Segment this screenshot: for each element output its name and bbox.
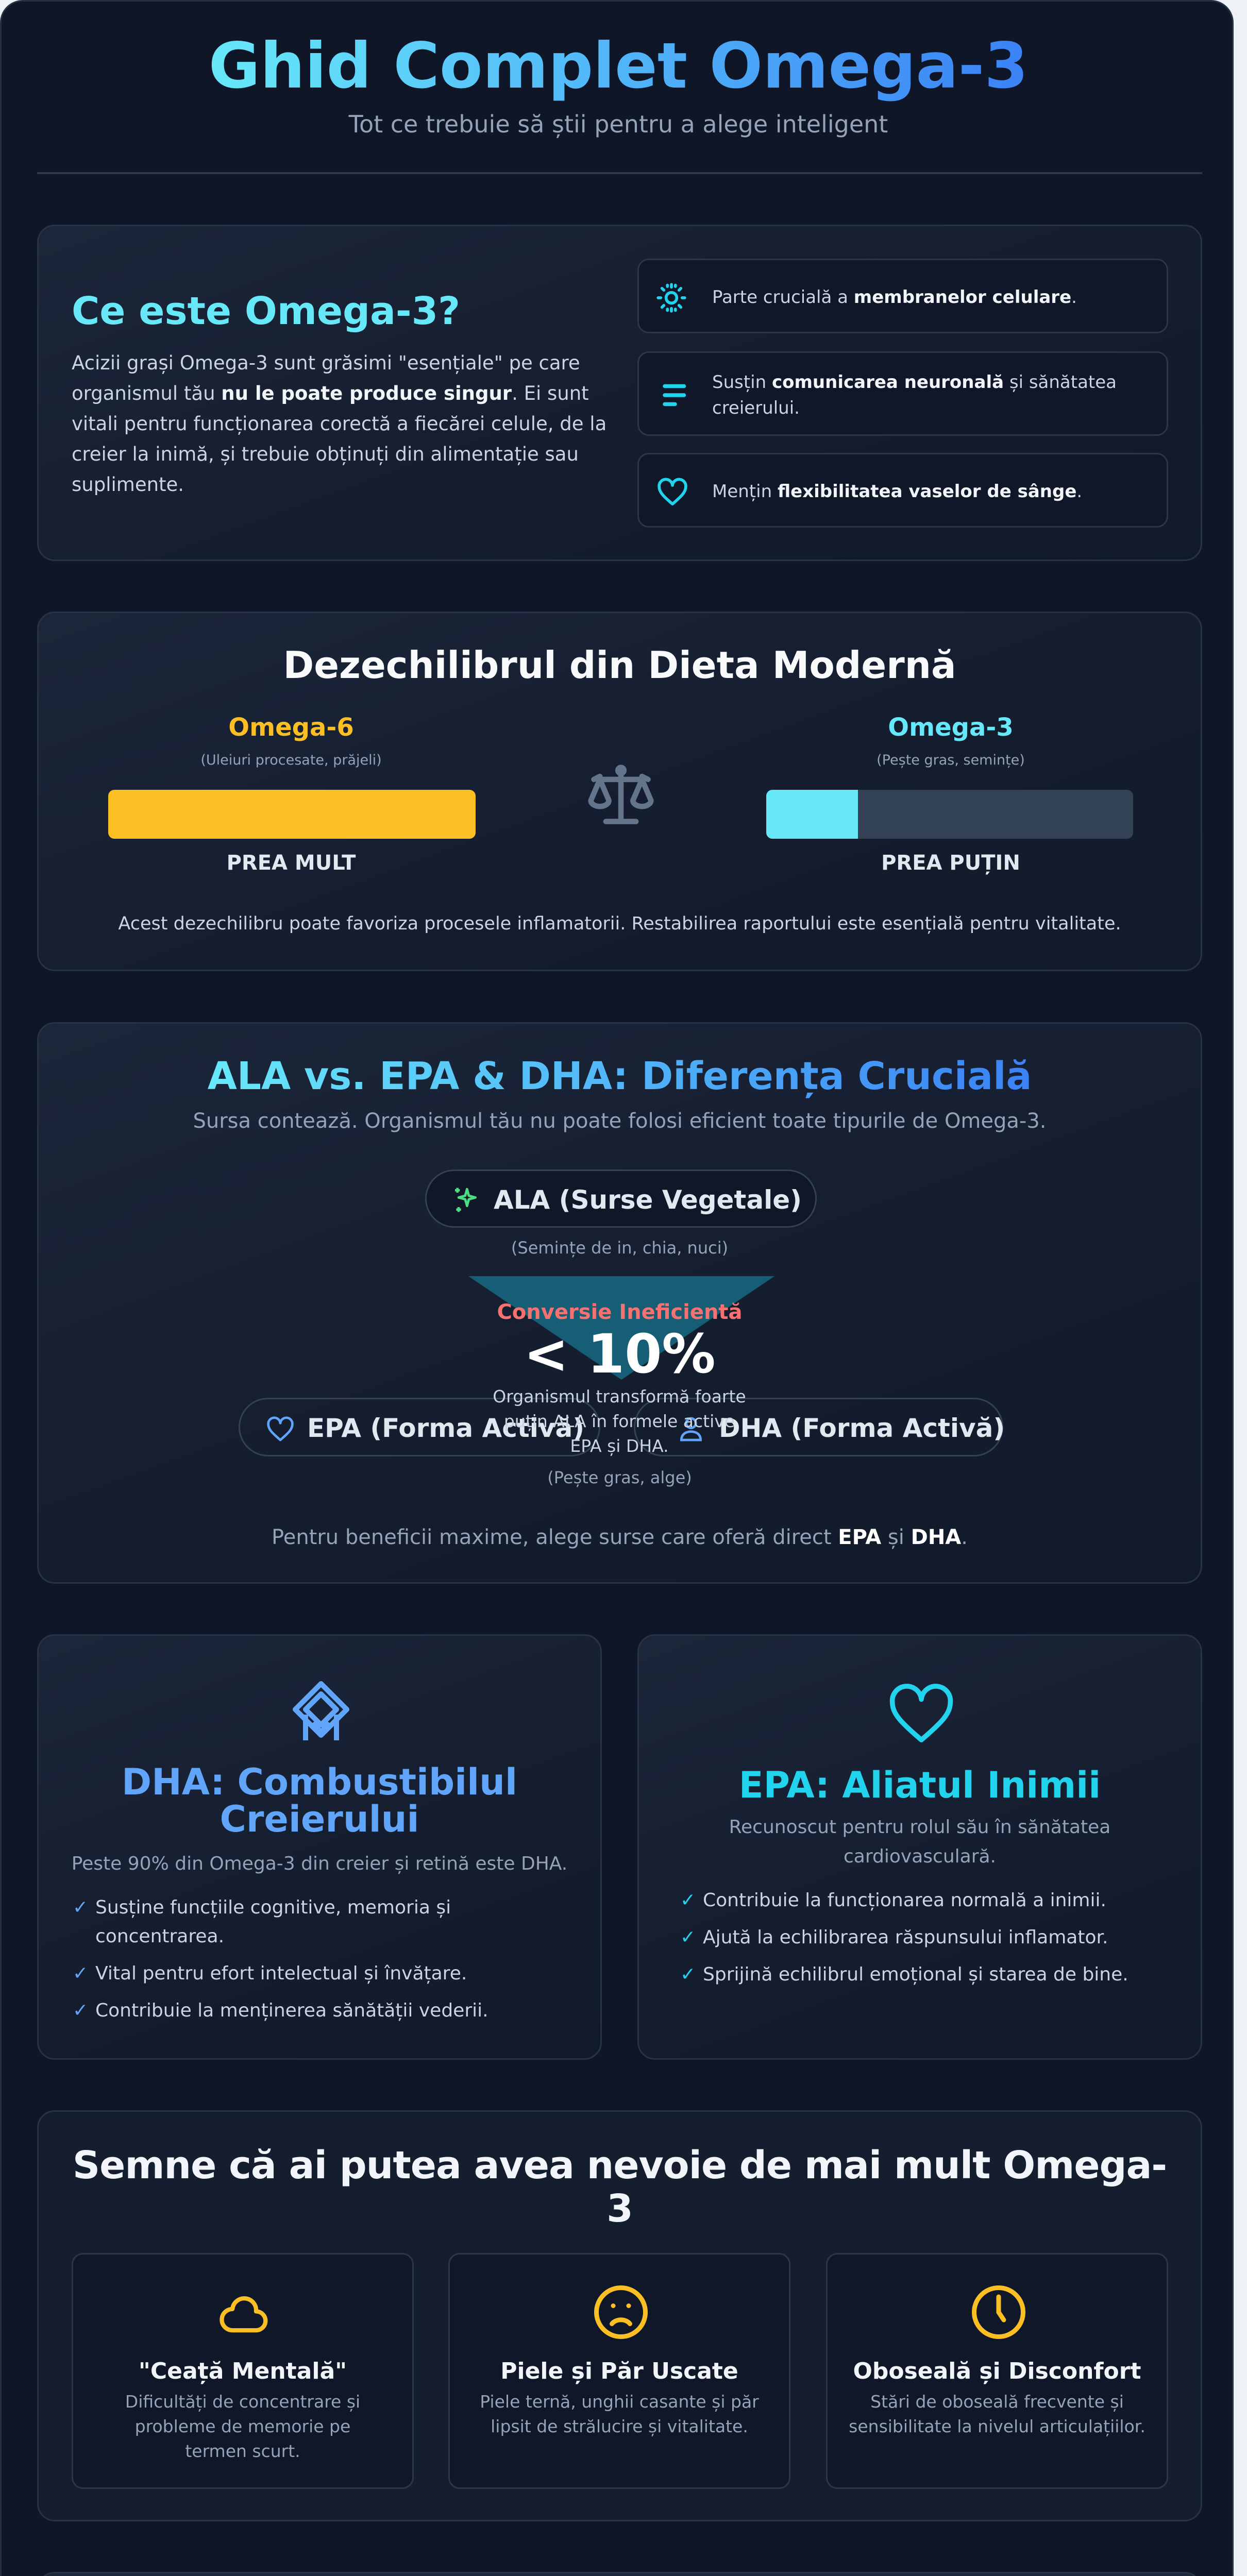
- list: DHA benefits: ✓: [73, 1897, 88, 1918]
- bar: omega-3: [766, 790, 1133, 839]
- omega-6 group: [108, 713, 476, 875]
- list: DHA benefits: ✓: [73, 2000, 88, 2021]
- card: piele: [448, 2253, 790, 2489]
- pill: ALA: ALA (Surse Vegetale): [494, 1185, 802, 1215]
- heading: DHA: DHA: Combustibilul: [122, 1761, 517, 1803]
- subtitle: Sursa contează. Organismul tău nu poate folosi eficient toate tipurile de Omega-3.: [193, 1109, 1046, 1133]
- list: EPA benefits: Ajută la echilibrarea răspunsului inflamator.: [703, 1927, 1108, 1948]
- list: EPA benefits: ✓: [680, 1890, 696, 1911]
- panel: EPA card: [637, 1634, 1202, 2060]
- list: DHA benefits: Vital pentru efort intelectual și învățare.: [95, 1963, 467, 1984]
- icon: brain: [293, 1681, 349, 1740]
- icon: people: [680, 1417, 702, 1442]
- heading: [73, 2143, 1167, 2231]
- panel: revolutie: [37, 2572, 1202, 2576]
- icon: heart: [658, 478, 687, 506]
- pill: DHA: [634, 1398, 1003, 1456]
- icon: heart: [889, 1684, 953, 1742]
- list: DHA benefits: [73, 1897, 488, 2021]
- text: EPA/DHA sources: (Pește gras, alge): [547, 1468, 692, 1487]
- arrow: conversion funnel: [468, 1276, 774, 1380]
- heading: Dezechilibrul din Dieta Modernă: [283, 643, 956, 687]
- card: ceata mentala: [72, 2253, 414, 2489]
- list: EPA benefits: ✓: [680, 1964, 696, 1985]
- text: ALA sources: (Semințe de in, chia, nuci): [511, 1238, 728, 1258]
- text: DHA intro: Peste 90% din Omega-3 din creier și retină este DHA.: [72, 1853, 567, 1874]
- box: neuronal: Susțin comunicarea neuronală și sănătatea creierului.: [712, 372, 1117, 418]
- icon: cloud: [220, 2296, 268, 2333]
- list: EPA benefits: [680, 1890, 1128, 1985]
- title: Ghid Complet Omega-3: [209, 29, 1028, 103]
- text: note: Acest dezechilibru poate favoriza procesele inflamatorii. Restabilirea raportului este esențială pentru vitalitate.: [118, 913, 1121, 934]
- omega-3 group: [766, 713, 1133, 875]
- icon: clock: [972, 2285, 1025, 2339]
- icon: cell: [656, 283, 686, 313]
- omega-6 group: PREA MULT: [227, 851, 356, 875]
- omega-6 group: Omega-6: [228, 713, 354, 742]
- panel: dezechilibru: [37, 612, 1202, 971]
- card: oboseala: [826, 2253, 1168, 2489]
- icon: sad face: [594, 2285, 648, 2339]
- pill: EPA: [239, 1398, 600, 1456]
- omega-3 group: Omega-3: [888, 713, 1014, 742]
- icon: sparkles: [455, 1188, 477, 1212]
- text block: definition: Acizii grași Omega-3 sunt grăsimi "esențiale" pe care organismul tău nu le poate produce singur. Ei sunt vitali pentru funcționarea corectă a fiecărei celule, de la creier la inimă, și trebuie obținuți din alimentație sau suplimente.: [72, 352, 606, 496]
- box: vessels: Mențin flexibilitatea vaselor de sânge.: [712, 481, 1082, 502]
- heading: ALA vs. EPA & DHA: Diferența Crucială: [208, 1054, 1032, 1098]
- card: oboseala: Oboseală și Disconfort: [853, 2358, 1141, 2384]
- omega-3 group: PREA PUȚIN: [881, 851, 1020, 875]
- pill: ALA: [425, 1170, 817, 1228]
- icon: lines: [663, 384, 686, 406]
- text: conversion explanation: Organismul transformă foarte puțin ALA în formele active EPA și DHA.: [493, 1386, 746, 1456]
- heading: EPA: EPA: Aliatul Inimii: [739, 1764, 1101, 1806]
- omega-3 group: (Pește gras, semințe): [877, 752, 1025, 768]
- list: EPA benefits: Sprijină echilibrul emoțional și starea de bine.: [703, 1964, 1128, 1985]
- card: ceata mentala: Dificultăți de concentrare și probleme de memorie pe termen scurt.: [125, 2392, 360, 2461]
- heading: DHA: Creierului: [220, 1798, 419, 1840]
- panel: ALA vs EPA DHA: [37, 1022, 1202, 1584]
- text: recommendation: Pentru beneficii maxime, alege surse care oferă direct EPA și DHA.: [272, 1526, 968, 1549]
- list: EPA benefits: Contribuie la funcționarea normală a inimii.: [703, 1890, 1106, 1911]
- box: membrane: Parte crucială a membranelor celulare.: [712, 287, 1077, 308]
- text: EPA intro: Recunoscut pentru rolul său în sănătatea cardiovasculară.: [729, 1817, 1110, 1867]
- number: <10%: < 10%: [524, 1323, 716, 1385]
- icon: heart: [267, 1416, 294, 1442]
- omega-6 group: (Uleiuri procesate, prăjeli): [200, 752, 382, 768]
- pill: DHA: DHA (Forma Activă): [719, 1413, 1005, 1443]
- heading: DHA: [122, 1761, 517, 1840]
- heading: ce este: Ce este Omega-3?: [72, 289, 460, 333]
- panel: DHA card: [37, 1634, 602, 2060]
- box: membrane: [637, 259, 1168, 333]
- card: piele: Piele ternă, unghii casante și păr lipsit de strălucire și vitalitate.: [480, 2392, 759, 2436]
- pill: EPA: EPA (Forma Activă): [307, 1413, 584, 1443]
- list: DHA benefits: ✓: [73, 1963, 88, 1984]
- card: oboseala: Stări de oboseală frecvente și sensibilitate la nivelul articulațiilor.: [849, 2392, 1145, 2436]
- list: DHA benefits: Contribuie la menținerea sănătății vederii.: [95, 2000, 488, 2021]
- list: DHA benefits: Susține funcțiile cognitive, memoria și concentrarea.: [95, 1897, 451, 1947]
- heading: Semne că ai putea avea nevoie de mai mult Omega-: [73, 2143, 1167, 2188]
- text: conversion label: Conversie Ineficientă: [497, 1300, 743, 1324]
- box: neuronal: [637, 351, 1168, 436]
- bar: omega-6: [108, 790, 476, 839]
- box: vessels: [637, 453, 1168, 528]
- subtitle: Tot ce trebuie să știi pentru a alege inteligent: [349, 110, 888, 138]
- card: ceata mentala: "Ceață Mentală": [139, 2358, 347, 2384]
- list: EPA benefits: ✓: [680, 1927, 696, 1948]
- icon: scale: [588, 765, 654, 824]
- card: piele: Piele și Păr Uscate: [500, 2358, 738, 2384]
- heading: 3: [606, 2187, 633, 2231]
- panel: ce este omega-3: [37, 225, 1202, 561]
- panel: semne: [37, 2110, 1202, 2521]
